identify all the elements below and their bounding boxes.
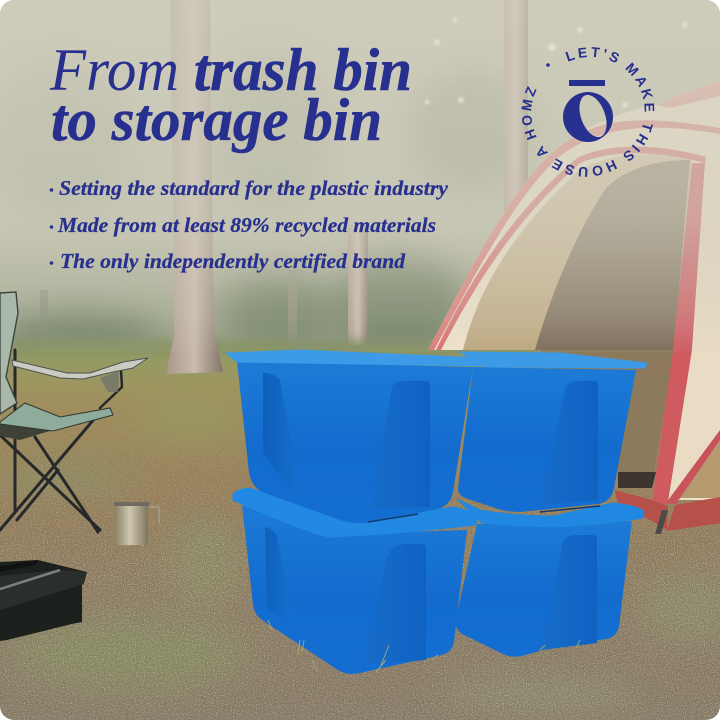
tent: lower tan triangle [680, 440, 720, 498]
tree trunk: foreground pine [166, 0, 223, 374]
tent [428, 80, 720, 534]
tent: outer pink pole band [428, 120, 720, 350]
chair: seat [0, 403, 113, 431]
badge: macron bar [569, 80, 605, 86]
body [242, 505, 467, 674]
tent: red vertical strip [652, 163, 705, 505]
bin: back right upper [458, 352, 647, 512]
headline: to storage bin [51, 87, 382, 153]
chair: net pocket [100, 371, 119, 392]
tent: black strip [618, 472, 656, 488]
tent: canvas body [428, 80, 720, 500]
bin: front left lower [233, 488, 477, 674]
bullet list [50, 176, 449, 273]
side recess [265, 527, 283, 618]
tent: upper right band [655, 80, 720, 108]
bin: back right lower [455, 499, 644, 657]
body [458, 367, 636, 512]
steel cup [114, 502, 159, 545]
front recess [363, 544, 426, 665]
handle recess [542, 535, 597, 650]
tent: pole peg [655, 510, 668, 534]
chair: arm rest [12, 358, 148, 379]
camp chair [0, 292, 148, 532]
bokeh highlights [424, 18, 688, 108]
bullet 2: Made from at least 89% recycled materials [57, 213, 436, 237]
lid [457, 499, 644, 527]
bullet 1: Setting the standard for the plastic industry [59, 176, 449, 200]
badge: letter o [563, 92, 613, 142]
body [237, 361, 473, 523]
bottom straps [368, 514, 418, 522]
tent: interior [535, 160, 690, 350]
storage bins stack [226, 350, 647, 674]
headline: From trash bin [49, 37, 412, 103]
tent: red skirt [615, 490, 720, 531]
grass tufts [268, 620, 580, 672]
tent: door panel [463, 154, 692, 350]
lid [460, 352, 647, 368]
handle recess [540, 381, 598, 505]
front recess [370, 381, 430, 508]
lid [233, 488, 477, 537]
tent: pink diagonal strip [666, 430, 720, 504]
chair: legs [0, 350, 122, 532]
lid [226, 350, 484, 366]
headline [49, 37, 412, 153]
badge: separator dot [546, 63, 550, 67]
tent: cream right panel [668, 231, 700, 500]
chair: seat underside [0, 424, 50, 440]
bottom straps [540, 506, 600, 512]
logo badge [522, 47, 654, 177]
tent: inner pink pole band [436, 147, 706, 350]
fog overlay [0, 0, 720, 352]
body [455, 521, 632, 657]
bullet 3: The only independently certified brand [60, 249, 405, 273]
tent: interior ground [540, 350, 673, 472]
background: misty forest [0, 0, 720, 380]
bin: front left upper [226, 350, 484, 523]
badge: circular slogan: LET'S MAKE THIS HOUSE A HOMZ [522, 47, 654, 177]
chair: back [0, 292, 18, 414]
ground: dirt and grass [0, 340, 720, 720]
side recess [263, 373, 303, 507]
black camp stove box [0, 560, 87, 641]
